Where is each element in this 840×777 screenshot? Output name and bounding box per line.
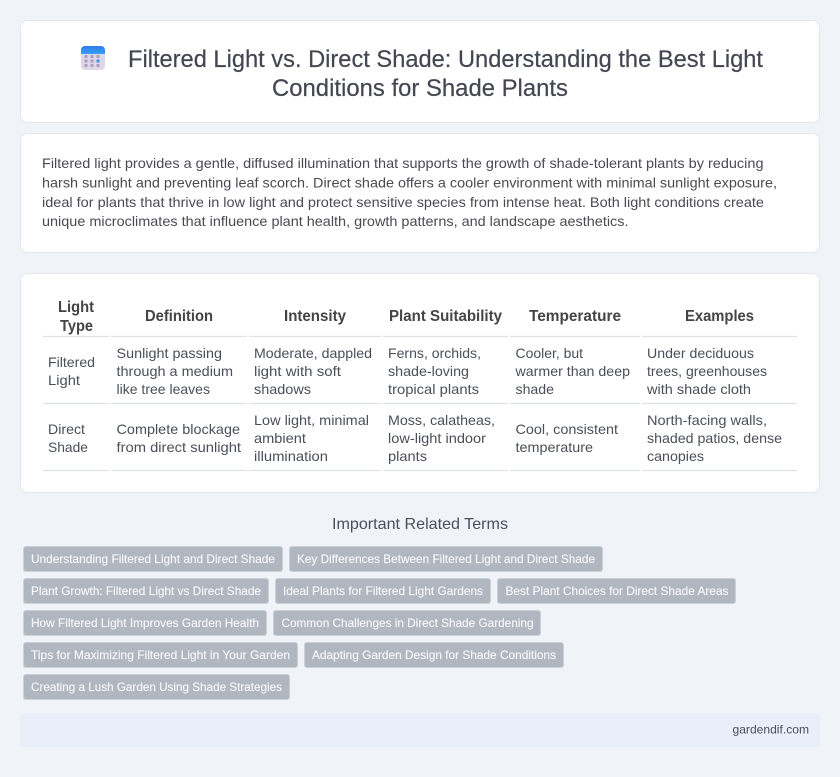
title: Conditions for Shade Plants bbox=[272, 75, 568, 102]
table row: filtered light: Light bbox=[48, 372, 80, 388]
table row: direct shade bbox=[43, 412, 797, 470]
table header row: Temperature bbox=[529, 308, 621, 325]
table row: direct shade: Cool, consistent bbox=[516, 421, 618, 437]
table row: filtered light: through a medium bbox=[116, 363, 233, 379]
table row: direct shade: canopies bbox=[647, 448, 704, 464]
heading: important related terms: Important Related Terms bbox=[332, 516, 508, 533]
tag: Ideal Plants for Filtered Light Gardens bbox=[283, 584, 483, 598]
tag: Best Plant Choices for Direct Shade Areas bbox=[506, 584, 728, 598]
tag bbox=[24, 610, 266, 636]
text block: description: ideal for plants that thrive in low light and protect sensitive species from intense heat. Both light conditions create bbox=[42, 194, 764, 210]
table row: filtered light bbox=[43, 345, 797, 404]
table row: direct shade: Shade bbox=[48, 439, 88, 455]
icon: calendar bbox=[81, 46, 105, 70]
table row: direct shade: plants bbox=[388, 448, 427, 464]
tag bbox=[24, 578, 268, 604]
text block: description bbox=[42, 155, 777, 229]
tag: Plant Growth: Filtered Light vs Direct Shade bbox=[31, 584, 261, 598]
table row: filtered light: shade bbox=[516, 381, 554, 397]
tag: Understanding Filtered Light and Direct Shade bbox=[31, 552, 275, 566]
table row: filtered light: Ferns, orchids, bbox=[388, 345, 481, 361]
panel: header bbox=[20, 20, 820, 122]
table row: filtered light: Cooler, but bbox=[516, 345, 583, 361]
table row: direct shade: from direct sunlight bbox=[116, 439, 241, 455]
panel: comparison table bbox=[20, 274, 820, 492]
table row: filtered light: Under deciduous bbox=[647, 345, 754, 361]
table row: direct shade: shaded patios, dense bbox=[647, 430, 782, 446]
footer bbox=[20, 713, 820, 747]
table row: filtered light: Moderate, dappled bbox=[254, 345, 372, 361]
table row: filtered light: tropical plants bbox=[388, 381, 479, 397]
table row: filtered light: with shade cloth bbox=[646, 381, 751, 397]
tag bbox=[290, 546, 602, 572]
table header row bbox=[43, 299, 797, 336]
tag bbox=[498, 578, 736, 604]
table header row: Type bbox=[60, 318, 93, 335]
tag bbox=[276, 578, 490, 604]
tag bbox=[24, 546, 282, 572]
panel: description bbox=[20, 134, 820, 252]
footer: gardendif.com bbox=[732, 722, 809, 736]
tag bbox=[304, 642, 564, 668]
table row: direct shade: low-light indoor bbox=[388, 430, 486, 446]
table row: filtered light: trees, greenhouses bbox=[647, 363, 767, 379]
table row: direct shade: illumination bbox=[254, 448, 328, 464]
table header row: Light bbox=[58, 299, 95, 316]
table row: direct shade: Complete blockage bbox=[116, 421, 240, 437]
table row: direct shade: Moss, calatheas, bbox=[388, 412, 495, 428]
tag: Key Differences Between Filtered Light and Direct Shade bbox=[297, 552, 595, 566]
table row: direct shade: temperature bbox=[516, 439, 593, 455]
table row: filtered light: Sunlight passing bbox=[116, 345, 222, 361]
table row: filtered light: shadows bbox=[254, 381, 311, 397]
text block: description: unique microclimates that influence plant health, growth patterns, and landscape aesthetics. bbox=[42, 213, 628, 229]
tag bbox=[274, 610, 540, 636]
table row: filtered light: shade-loving bbox=[388, 363, 469, 379]
title bbox=[128, 46, 763, 102]
tag bbox=[24, 674, 290, 700]
tag list: related terms bbox=[24, 546, 736, 700]
table row: direct shade: North-facing walls, bbox=[647, 412, 767, 428]
tag: Adapting Garden Design for Shade Conditions bbox=[312, 648, 556, 662]
table row: filtered light: warmer than deep bbox=[514, 363, 630, 379]
tag: How Filtered Light Improves Garden Health bbox=[31, 616, 259, 630]
table header row: Plant Suitability bbox=[389, 308, 502, 325]
title: Filtered Light vs. Direct Shade: Understanding the Best Light bbox=[128, 46, 763, 73]
table header row: Definition bbox=[145, 308, 213, 325]
table header row: Examples bbox=[685, 308, 754, 325]
table row: direct shade: ambient bbox=[254, 430, 306, 446]
table row: filtered light: like tree leaves bbox=[116, 381, 210, 397]
tag: Creating a Lush Garden Using Shade Strategies bbox=[31, 680, 282, 694]
table row: direct shade: Direct bbox=[48, 421, 85, 437]
table header row: Intensity bbox=[284, 308, 346, 325]
text block: description: harsh sunlight and preventing leaf scorch. Direct shade offers a cooler environment with minimal sunlight exposure, bbox=[42, 174, 777, 190]
table row: filtered light: light with soft bbox=[254, 363, 341, 379]
table row: direct shade: Low light, minimal bbox=[254, 412, 369, 428]
text block: description: Filtered light provides a gentle, diffused illumination that supports the growth of shade-tolerant plants by reducing bbox=[42, 155, 764, 171]
tag: Tips for Maximizing Filtered Light in Your Garden bbox=[31, 648, 290, 662]
table row: filtered light: Filtered bbox=[48, 354, 95, 370]
tag: Common Challenges in Direct Shade Gardening bbox=[282, 616, 534, 630]
tag bbox=[24, 642, 298, 668]
